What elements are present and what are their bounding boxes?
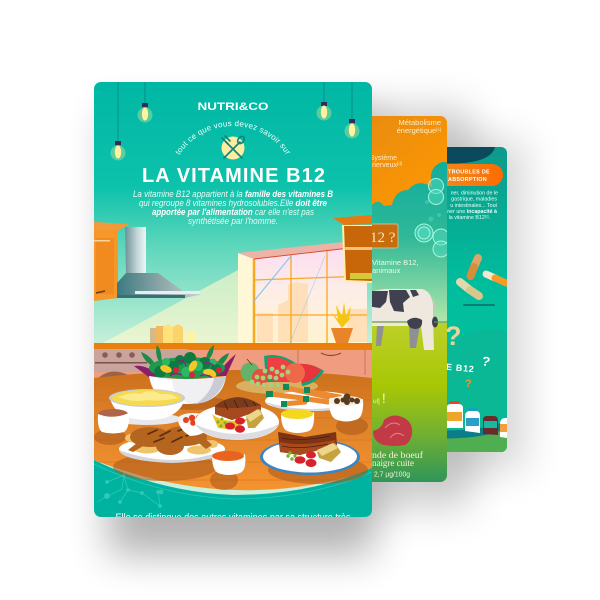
label: metabolisme energetique	[396, 120, 441, 134]
range hood	[117, 227, 200, 298]
icon: cell molecules	[415, 178, 449, 257]
heading box	[372, 224, 398, 248]
text: viande de boeuf maigre cuite	[372, 450, 423, 478]
icon: fork and spoon	[222, 135, 246, 160]
label: systeme nerveux: [d]	[397, 161, 402, 166]
right cabinet	[333, 215, 372, 283]
counter and lower cupboards	[94, 349, 372, 379]
paragraph: absorption: .	[489, 215, 490, 221]
window	[238, 239, 372, 343]
intro paragraph: qui regroupe 8 vitamines hydrosolubles.Elle doit être	[139, 198, 328, 209]
teal hill	[447, 385, 507, 452]
icon: beef cut	[373, 416, 412, 446]
steak plate	[195, 397, 279, 440]
paragraph: absorption: ner, diminution de le	[451, 190, 498, 196]
mashed potato bowl	[109, 389, 185, 425]
soft drop shadow	[108, 108, 525, 555]
icon: capsules	[460, 258, 506, 296]
label: metabolisme energetique: Métabolisme	[398, 118, 441, 127]
arched subtitle: tout ce que vous devez savoir sur	[176, 120, 290, 154]
paragraph: absorption: gastrique, maladies	[451, 197, 497, 203]
dark header shape	[447, 147, 495, 164]
middle card: sources alimentaires	[372, 116, 447, 482]
lamp 2	[138, 82, 152, 122]
paragraph: absorption: la vitamine B12	[449, 215, 485, 221]
green ground	[447, 431, 507, 452]
text: bottom paragraph: Elle se distingue des autres vitamines par sa structure très	[116, 512, 351, 524]
logo: NUTRI&CO	[198, 101, 269, 113]
text: vitamine animaux: animaux	[372, 266, 401, 275]
orange heading pill	[447, 164, 503, 186]
carrot plate	[265, 384, 357, 411]
intro paragraph: La vitamine B12 appartient à la famille des vitamines B	[133, 189, 333, 200]
title: LA VITAMINE B12	[142, 165, 325, 187]
salad bowl	[134, 345, 236, 404]
teal bottom section	[94, 460, 372, 517]
teal cloud background	[372, 162, 447, 323]
heading fragment: vitamine B12: E B12	[446, 362, 475, 374]
left cabinet	[94, 222, 129, 301]
lamp 4	[344, 82, 360, 138]
small bowl: corn	[281, 409, 314, 433]
label: systeme nerveux: Système	[370, 155, 397, 162]
orange heading pill: ABSORPTION	[448, 177, 487, 183]
ribs plate	[260, 432, 360, 475]
label: metabolisme energetique: [c]	[436, 127, 441, 132]
text: vitamine animaux	[372, 260, 418, 273]
food illustration	[94, 345, 368, 490]
icon: supplement bottles	[447, 401, 507, 438]
text: viande de boeuf maigre cuite: 2,7 µg/100g	[374, 472, 410, 478]
teal wall background	[94, 82, 372, 517]
table shadows	[94, 396, 368, 490]
label: systeme nerveux	[372, 154, 402, 167]
paragraph: absorption: u intestinales... Tout	[450, 203, 498, 209]
jars on the counter	[150, 324, 195, 343]
plant	[331, 302, 356, 343]
kitchen wall, window and counter	[94, 215, 372, 380]
question marks: ?	[465, 378, 472, 390]
wooden table	[94, 370, 372, 490]
chicken plate	[119, 426, 225, 463]
hanging lamps	[110, 82, 360, 160]
question marks	[447, 326, 490, 387]
small bowl: cherry tomatoes	[178, 413, 208, 436]
green field	[372, 323, 447, 482]
paragraph: absorption: [c]	[485, 214, 489, 218]
small bowl: olives	[329, 394, 363, 422]
intro paragraph: synthétisée par l'homme.	[188, 216, 278, 227]
question marks: ?	[481, 353, 492, 369]
small bowl: carrots	[212, 451, 245, 475]
lamp 3	[316, 82, 332, 120]
orange heading pill: TROUBLES DE	[448, 170, 490, 176]
text: nutritional note: ul]!	[373, 390, 386, 406]
molecule network	[97, 474, 163, 508]
text: vitamine animaux: Vitamine B12,	[372, 258, 419, 267]
city skyline	[257, 282, 367, 342]
paragraph: absorption: ner une incapacité à	[447, 209, 497, 215]
fruit board	[236, 355, 324, 394]
small bowl: beans	[98, 409, 129, 434]
icon: cow	[366, 289, 447, 350]
label: systeme nerveux: nerveux	[372, 162, 397, 169]
back card: troubles de l'absorption	[447, 147, 507, 452]
front card: la vitamine B12	[94, 82, 372, 517]
label: metabolisme energetique: énergétique	[397, 126, 436, 135]
light beam	[103, 270, 238, 343]
question marks: ?	[445, 321, 462, 351]
intro paragraph: apportée par l'alimentation car elle n'est pas	[152, 207, 314, 218]
heading box: 12 ?	[370, 230, 396, 246]
text: viande de boeuf maigre cuite: nde de boeuf	[372, 450, 423, 460]
lamp 1	[110, 82, 126, 160]
paragraph: absorption	[447, 190, 498, 221]
pill shadow line	[463, 304, 495, 306]
intro paragraph	[133, 189, 333, 227]
text: viande de boeuf maigre cuite: naigre cuite	[372, 458, 414, 468]
